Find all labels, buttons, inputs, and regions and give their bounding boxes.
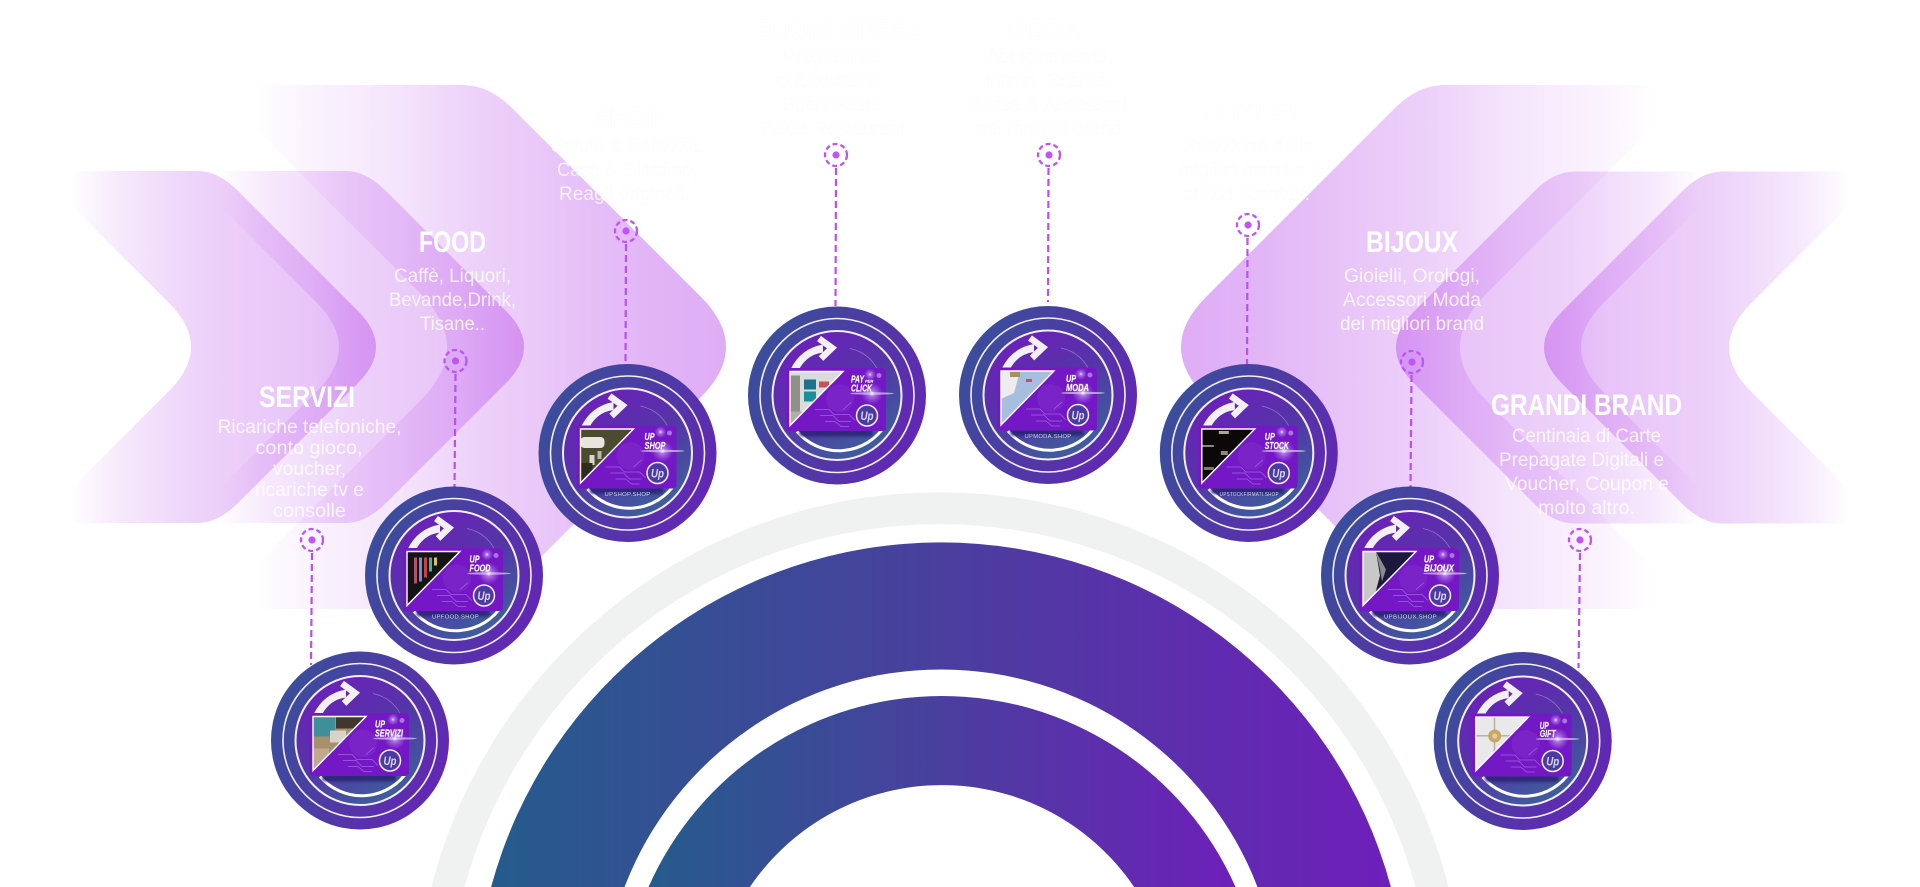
badge: up servizi: SERVIZI [375,728,403,740]
badge: up gift: Up [1546,754,1559,768]
badge: up bijoux: UP [1424,554,1434,566]
badge: up shop: UP [644,432,655,443]
text block: moda: Abbigliamento, [986,47,1113,68]
text block: buoni spesa: Buoni Pasto [783,95,881,116]
badge: pay per click: PER [865,378,873,384]
text block: food: FOOD [419,226,486,259]
text block: buoni spesa: Ticket Restaurant [758,119,906,140]
text block: moda [970,14,1127,140]
text block: grandi brand: Voucher, Coupon e [1505,474,1669,495]
badge: up gift [1434,652,1612,830]
text block: shop: SHOP [593,102,663,135]
text block: moda: Intimo, Scarpe, [985,71,1112,92]
badge: up food: UPFOOD.SHOP [432,614,479,620]
text block: servizi: SERVIZI [259,381,355,414]
text block: grandi brand: Prepagate Digitali e [1499,450,1664,471]
text block: shop [551,102,704,205]
text block: shop: Casa & Giardino, [557,160,697,181]
connector: bijoux [1401,351,1423,488]
badge: up bijoux [1321,486,1499,664]
badge: up shop: UPSHOP.SHOP [604,492,651,498]
badge: pay per click [748,306,926,484]
connector: shop [615,220,637,365]
text block: outlet [1179,97,1320,205]
text block: outlet: Selezione delle [1183,136,1314,157]
text block: moda: dei migliori brand [977,119,1122,140]
text block: grandi brand [1491,389,1682,519]
badge: up stock [1160,364,1338,542]
text block: outlet: prezzi scontati. [1182,184,1310,205]
text block: bijoux: BIJOUX [1366,226,1458,259]
badge: up stock: STOCK [1265,441,1289,452]
badge: up food [365,486,543,664]
badge: up servizi [271,652,449,830]
badge: up moda: UP [1066,374,1076,385]
badge: up shop [538,364,716,542]
badge: up moda [959,306,1137,484]
connector: grandi brand [1569,529,1591,668]
text block: food: Caffè, Liquori, [394,266,511,287]
connector: buoni spesa [825,144,847,306]
arch: outer grey band [431,492,1449,887]
text block: grandi brand: GRANDI BRAND [1491,389,1682,422]
badge: up gift: GIFT [1540,729,1556,740]
text block: servizi [218,381,402,522]
text block: bijoux: dei migliori brand [1340,314,1484,335]
text block: servizi: conto gioco, [256,438,362,459]
chevron: bijoux [1396,172,1735,524]
chevron: shop [212,85,726,609]
badge: up shop: Up [651,466,664,480]
badge: up bijoux: BIJOUX [1424,564,1455,574]
chevron: servizi [37,171,376,523]
text block: outlet: OUTLET [1203,97,1301,130]
badge: up food: UP [470,554,480,566]
badge: up food: Up [478,589,490,603]
badge: up moda: UPMODA.SHOP [1024,434,1072,440]
badge: up food: FOOD [470,564,490,574]
text block: buoni spesa: Programma [783,47,880,68]
chevron: outlet [1181,85,1695,609]
text block: servizi: ricariche tv e [255,480,364,501]
text block: bijoux: Accessori Moda [1343,290,1481,311]
text block: moda: MODA [1004,14,1081,47]
text block: bijoux: Gioielli, Orologi, [1344,266,1480,287]
text block: grandi brand: molto altro. [1538,498,1635,519]
badge: up shop: SHOP [644,441,666,452]
chevron: food [185,171,524,523]
text block: buoni spesa: pubblicitario [777,71,880,92]
badge: up moda: MODA [1066,383,1089,394]
text block: buoni spesa: BUONI SPESA [755,14,923,47]
text block: shop: Reagli originali.. [559,184,695,205]
text block: outlet: migliori marche a [1179,160,1320,181]
badge: pay per click: PAY [851,374,865,386]
badge: up bijoux: UPBIJOUX.SHOP [1384,614,1437,620]
badge: pay per click: CLICK [851,384,873,394]
text block: bijoux [1340,226,1484,335]
text block: food [389,226,516,335]
badge: up servizi: Up [384,754,396,768]
badge: up stock: UP [1265,432,1275,443]
badge: up gift: UP [1540,721,1549,732]
text block: moda: Borse & Accessori [970,95,1127,116]
badge: up servizi: UP [375,720,385,730]
connector: food [444,350,466,488]
badge: up stock: Up [1272,466,1285,480]
badge: pay per click: Up [860,409,874,423]
text block: servizi: Ricariche telefoniche, [218,417,402,438]
chevron: grandi brand [1544,172,1883,524]
text block: shop: Salute & Bellezza, [551,136,704,157]
text block: food: Bevande,Drink, [389,290,516,311]
arch: large gradient band [491,542,1391,887]
badge: up stock: UPSTOCKFIRMATI.SHOP [1220,492,1279,498]
text block: grandi brand: Centinaia di Carte [1512,426,1661,447]
badge: up bijoux: Up [1434,589,1446,603]
text block: food: Tisane.. [420,314,485,335]
text block: servizi: voucher, [273,459,346,480]
text block: servizi: consolle [273,501,346,522]
badge: up moda: Up [1072,408,1084,422]
connector: moda [1038,144,1060,302]
connector: servizi [301,529,323,665]
text block: buoni spesa [755,14,923,140]
arch: small gradient band [648,696,1236,887]
connector: outlet [1237,214,1259,365]
